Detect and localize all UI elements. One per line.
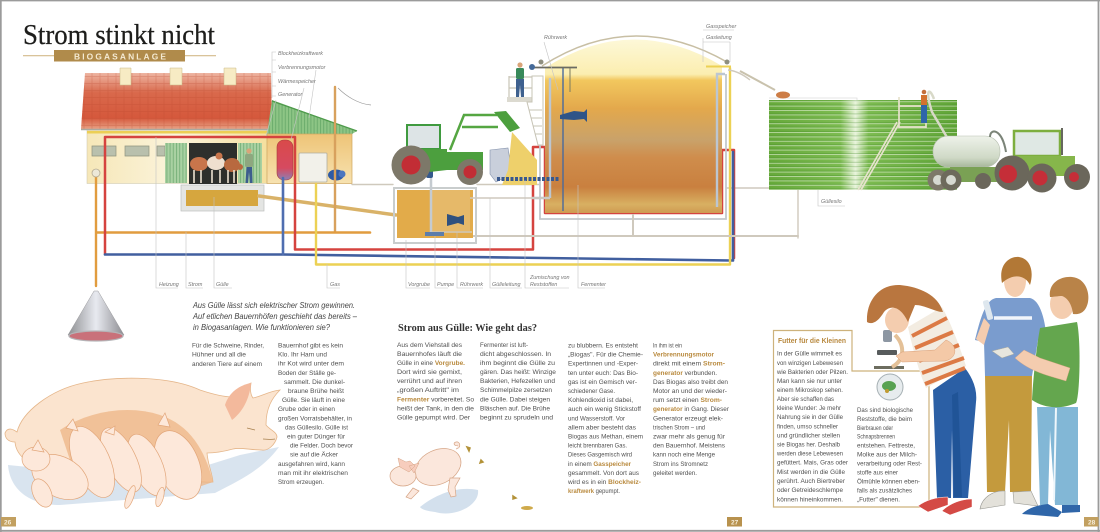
icon: silo worker xyxy=(921,90,927,123)
text block: page 27 column 3: kraftwerk gepumpt. xyxy=(568,488,620,495)
icon: blue shoes xyxy=(1022,504,1080,517)
icon: pit agitator xyxy=(447,214,464,226)
text block: page 27 column 4 xyxy=(653,342,730,477)
callout text left: gerührt. Auch Biertreber xyxy=(777,478,846,485)
intro text: in Biogasanlagen. Wie funktionieren sie? xyxy=(193,323,331,332)
text block: page 27 column 3: „Biogas". Für die Chemie- xyxy=(568,352,643,359)
icon: boy shoes xyxy=(980,491,1038,509)
text block: page 27 columns 1 and 2: beginnt zu sprudeln und xyxy=(480,414,553,422)
text block: page 27 column 4: generator verbunden. xyxy=(653,370,717,377)
stable pit xyxy=(181,185,264,211)
page number 26 xyxy=(1,517,16,526)
intro text: Aus Gülle lässt sich elektrischer Strom gewinnen. xyxy=(192,301,355,310)
text block: page 26: Strom erzeugen. xyxy=(278,479,324,486)
text block: page 26: sie auf die Äcker xyxy=(290,451,339,459)
callout text right: verarbeitung oder Rest- xyxy=(857,460,922,468)
diagram labels and leader lines xyxy=(156,24,845,288)
callout text left: Mist werden in die Gülle xyxy=(777,469,845,476)
callout text left: und gründlicher stellen xyxy=(777,432,840,439)
text block: page 27 column 3: gas ist ein Gemisch ver- xyxy=(568,379,637,386)
text block: page 26: Bauernhof gibt es kein xyxy=(278,342,343,350)
callout text right: Molke aus der Milch- xyxy=(857,452,917,458)
text block: page 27 column 3: zu blubbern. Es entsteht xyxy=(568,342,638,350)
text block: page 27 column 4: geleitet werden. xyxy=(653,470,697,477)
diagram labels and leader lines: Gülleleitung xyxy=(492,282,520,288)
text block: page 27 column 4: kann noch eine Menge xyxy=(653,452,715,459)
diagram labels and leader lines: Fermenter xyxy=(581,282,606,288)
icon: cows in stable xyxy=(190,152,243,183)
page number 28: 28 xyxy=(1088,520,1096,526)
text block: page 26: Für die Schweine, Rinder, xyxy=(192,342,264,350)
text block: page 27 columns 1 and 2: verrührt und auf ihren xyxy=(397,378,462,385)
icon: girl shoes xyxy=(918,497,972,515)
subtitle banner xyxy=(23,50,216,62)
text block: page 26: sammelt. Die dunkel- xyxy=(284,379,345,386)
text block: page 27 columns 1 and 2: Bauernhofes läuft die xyxy=(397,351,462,358)
text block: page 26: braune Brühe heißt xyxy=(288,388,344,395)
callout text right: falls als zusätzliches xyxy=(857,488,913,494)
icon: generator xyxy=(328,170,346,180)
diagram labels and leader lines: Verbrennungsmotor xyxy=(278,65,326,71)
icon: fermenter agitator xyxy=(560,68,587,122)
title: Strom stinkt nicht xyxy=(23,20,215,51)
text block: page 27 column 3: leicht brennbaren Gas. xyxy=(568,443,627,450)
text block: page 27 column 3: auch ein wenig Stickstoff xyxy=(568,406,641,413)
text block: page 27 column 3: Kohlendioxid ist dabei, xyxy=(568,397,633,404)
text block: page 26: man mit ihr elektrischen xyxy=(278,470,348,477)
callout text left: werden diese Lebewesen xyxy=(776,451,843,458)
chart: slurry silo xyxy=(740,71,957,190)
text block: page 27 column 4: rum setzt einen Strom- xyxy=(653,397,722,404)
callout text left: Aber sie schaffen das xyxy=(777,396,835,403)
icon: piglets xyxy=(22,413,211,510)
text block: page 27 columns 1 and 2: Bakterien, Hefezellen und xyxy=(480,378,555,385)
callout text right: Ölmühle können eben- xyxy=(857,478,920,486)
text block: page 27 columns 1 and 2 xyxy=(397,342,556,422)
text block: page 27 column 3: wird es in ein Blockheiz- xyxy=(567,479,641,486)
icon: ladder xyxy=(858,97,926,190)
text block: page 27 columns 1 and 2: heißt der Tank, in den die xyxy=(397,406,474,412)
text block: page 27 column 4: generator in Gang. Dieser xyxy=(653,406,730,413)
text block: page 27 columns 1 and 2: dicht abgeschlossen. In xyxy=(480,351,551,358)
text block: page 27 column 4: Strom ins Stromnetz xyxy=(653,461,708,468)
callout: Futter für die Kleinen xyxy=(774,330,929,507)
page number 26: 26 xyxy=(4,520,12,526)
icon: pump xyxy=(425,168,444,236)
text block: page 27 column 3: in einem Gasspeicher xyxy=(568,461,631,468)
text block: page 26: ausgefahren wird, kann xyxy=(278,461,345,468)
text block: page 26: ein guter Dünger für xyxy=(287,434,346,440)
text block: page 27 column 3: ten unter euch: Das Bio- xyxy=(568,370,638,377)
text block: page 27 columns 1 and 2: Dort wird sie gemixt, xyxy=(397,369,462,376)
text block: page 27 columns 1 and 2: „großen Auftritt" im xyxy=(397,387,460,394)
text block: page 27 column 4: den Bauernhof. Meistens xyxy=(653,443,726,450)
text block: page 27 columns 1 and 2: Schimmelpilze zersetzen xyxy=(480,387,552,394)
callout text left: einem Mikroskop sehen. xyxy=(777,387,843,394)
text block: page 27 column 4: In ihm ist ein xyxy=(653,342,682,350)
diagram labels and leader lines: Gasspeicher xyxy=(706,24,736,30)
intro text xyxy=(192,301,358,332)
text block: page 27 column 4: trischen Strom – und xyxy=(653,424,705,431)
icon: heat lamp xyxy=(68,291,124,341)
callout text right: Das sind biologische xyxy=(857,407,913,414)
text block: page 27 column 3: schiedener Gase. xyxy=(568,388,615,395)
callout text left: finden, umso schneller xyxy=(777,423,839,430)
page number 27: 27 xyxy=(731,520,739,526)
callout text left: wie Bakterien oder Pilzen. xyxy=(776,369,848,376)
text block: page 26: anderen Tiere auf einem xyxy=(192,361,262,368)
callout heading: Futter für die Kleinen xyxy=(778,338,846,345)
callout text left: sie Biogas her. Deshalb xyxy=(777,442,840,448)
heading: Strom aus Gülle: Strom aus Gülle: Wie geht das? xyxy=(398,323,537,334)
text block: page 27 columns 1 and 2: Gülle gepumpt wird. Der xyxy=(397,414,471,422)
callout text left: kleine Wunder: Je mehr xyxy=(777,405,842,412)
icon: engine box xyxy=(299,153,327,182)
callout text left: Nahrung sie in der Gülle xyxy=(777,414,843,421)
text block: page 27 column 4: zwar mehr als genug für xyxy=(653,434,726,440)
text block: page 26: Boden der Ställe ge- xyxy=(278,370,336,377)
icon: running piglet xyxy=(390,441,533,513)
text block: page 27 column 4: Generator erzeugt elek- xyxy=(653,415,723,422)
text block: page 27 column 3: Expertinnen und -Exper- xyxy=(568,361,638,368)
text block: page 26: Klo. Ihr Harn und xyxy=(278,352,327,359)
diagram labels and leader lines: Rührwerk xyxy=(460,282,483,288)
subtitle banner: BIOGASANLAGE xyxy=(74,52,166,62)
text block: page 26 xyxy=(192,342,354,486)
text block: page 27 columns 1 and 2: Gülle in eine Vorgrube. xyxy=(397,360,465,367)
icon: farmer xyxy=(245,148,253,183)
diagram labels and leader lines: Gas xyxy=(330,282,340,288)
icon: tractor with front loader xyxy=(392,111,520,185)
callout text right: „Futter" dienen. xyxy=(857,496,900,504)
callout text left: von winzigen Lebewesen xyxy=(777,360,843,367)
text block: page 26: großen Vorratsbehälter, in xyxy=(278,415,352,422)
text block: page 27 column 4: direkt mit einem Strom- xyxy=(653,361,725,368)
text block: page 27 columns 1 and 2: Fermenter ist luft- xyxy=(480,342,528,349)
callout text left: Man kann sie nur unter xyxy=(777,378,843,385)
illustration: boy with blue shirt xyxy=(975,257,1047,509)
text block: page 27 column 3: allem aber besteht das xyxy=(568,424,637,431)
diagram labels and leader lines: Vorgrube xyxy=(408,282,430,288)
text block: page 27 columns 1 and 2: die Gülle. Dabei steigen xyxy=(480,396,550,404)
callout text right: Schnapsbrennen xyxy=(857,434,895,440)
diagram labels and leader lines: Pumpe xyxy=(437,282,454,288)
diagram labels and leader lines: Güllesilo xyxy=(821,199,842,205)
diagram labels and leader lines: Gasleitung xyxy=(706,35,732,41)
intro text: Auf etlichen Bauernhöfen geschieht das bereits – xyxy=(192,312,358,321)
callout text right: Reststoffe, die beim xyxy=(857,416,912,423)
callout text left xyxy=(776,351,849,504)
chart: farm building xyxy=(81,68,357,211)
text block: page 27 column 3: Dieses Gasgemisch wird xyxy=(568,452,632,459)
callout text left: oder Getreideschlempe xyxy=(777,487,843,494)
diagram labels and leader lines: Blockheizkraftwerk xyxy=(278,51,323,57)
icon: biomass heap and auger xyxy=(490,132,560,185)
callout text right: entstehen. Fettreste, xyxy=(857,442,915,450)
text block: page 27 columns 1 and 2: Aus dem Viehstall des xyxy=(397,342,463,349)
text block: page 27 columns 1 and 2: Fermenter vorbereitet. So xyxy=(397,396,474,404)
icon: microscope xyxy=(874,330,904,369)
text block: page 27 column 4: Das Biogas also treibt den xyxy=(653,379,728,386)
chart: fermenter xyxy=(532,34,750,236)
illustration: girl at microscope xyxy=(867,285,976,515)
icon: platform with worker xyxy=(507,62,543,145)
text block: page 26: das Güllesilo. Gülle ist xyxy=(285,424,348,431)
diagram labels and leader lines: Gülle xyxy=(216,282,229,288)
icon: heat storage tank xyxy=(277,140,293,180)
page number 28 xyxy=(1084,517,1098,526)
text block: page 26: Gülle. Sie läuft in eine xyxy=(282,397,345,404)
callout text right: stoffe aus einer xyxy=(857,470,899,476)
diagram labels and leader lines: Generator xyxy=(278,92,302,98)
chart: pre-pit xyxy=(394,168,550,243)
illustration: sow with piglets xyxy=(5,378,280,510)
text block: page 27 column 4: Verbrennungsmotor xyxy=(653,352,714,359)
callout text left: gefüttert. Mais, Gras oder xyxy=(777,460,849,467)
callout text right: Bierbrauen oder xyxy=(857,425,894,432)
text block: page 27 columns 1 and 2: gären. Das heißt: Winzige xyxy=(480,369,556,376)
text block: page 27 column 4: Motor an und der wieder- xyxy=(653,388,727,395)
icon: slurry tanker and tractor xyxy=(928,128,1090,192)
text block: page 26: die Felder. Doch bevor xyxy=(290,443,354,450)
page number 27 xyxy=(727,517,742,526)
text block: page 26: Hühner und all die xyxy=(192,352,246,359)
diagram labels and leader lines: Reststoffen xyxy=(530,282,557,288)
illustration: boy with green shirt xyxy=(992,277,1088,517)
diagram labels and leader lines: Wärmespeicher xyxy=(278,79,316,85)
text block: page 26: ihr Kot wird unter dem xyxy=(278,361,345,368)
pipes and ground lines xyxy=(92,68,798,286)
callout text right xyxy=(857,407,922,504)
text block: page 27 column 3: gesammelt. Von dort aus xyxy=(568,470,640,477)
diagram labels and leader lines: Strom xyxy=(188,282,203,288)
diagram labels and leader lines: Zumischung von xyxy=(529,275,570,281)
icon: frog in magnifier xyxy=(877,374,903,400)
text block: page 27 column 3 xyxy=(567,342,643,495)
callout text left: In der Gülle wimmelt es xyxy=(777,351,843,358)
diagram labels and leader lines: Rührwerk xyxy=(544,35,567,41)
text block: page 27 column 3: und Wasserstoff. Vor xyxy=(568,415,626,422)
text block: page 27 columns 1 and 2: ihm beginnt die Gülle zu xyxy=(480,360,555,367)
diagram labels and leader lines: Heizung xyxy=(159,282,179,288)
text block: page 27 column 3: Biogas aus Methan, einem xyxy=(568,434,643,440)
text block: page 26: Grube oder in einen xyxy=(278,406,335,413)
callout text left: können hineinkommen. xyxy=(777,496,843,504)
text block: page 27 columns 1 and 2: Bläschen auf. Die Brühe xyxy=(480,406,550,412)
